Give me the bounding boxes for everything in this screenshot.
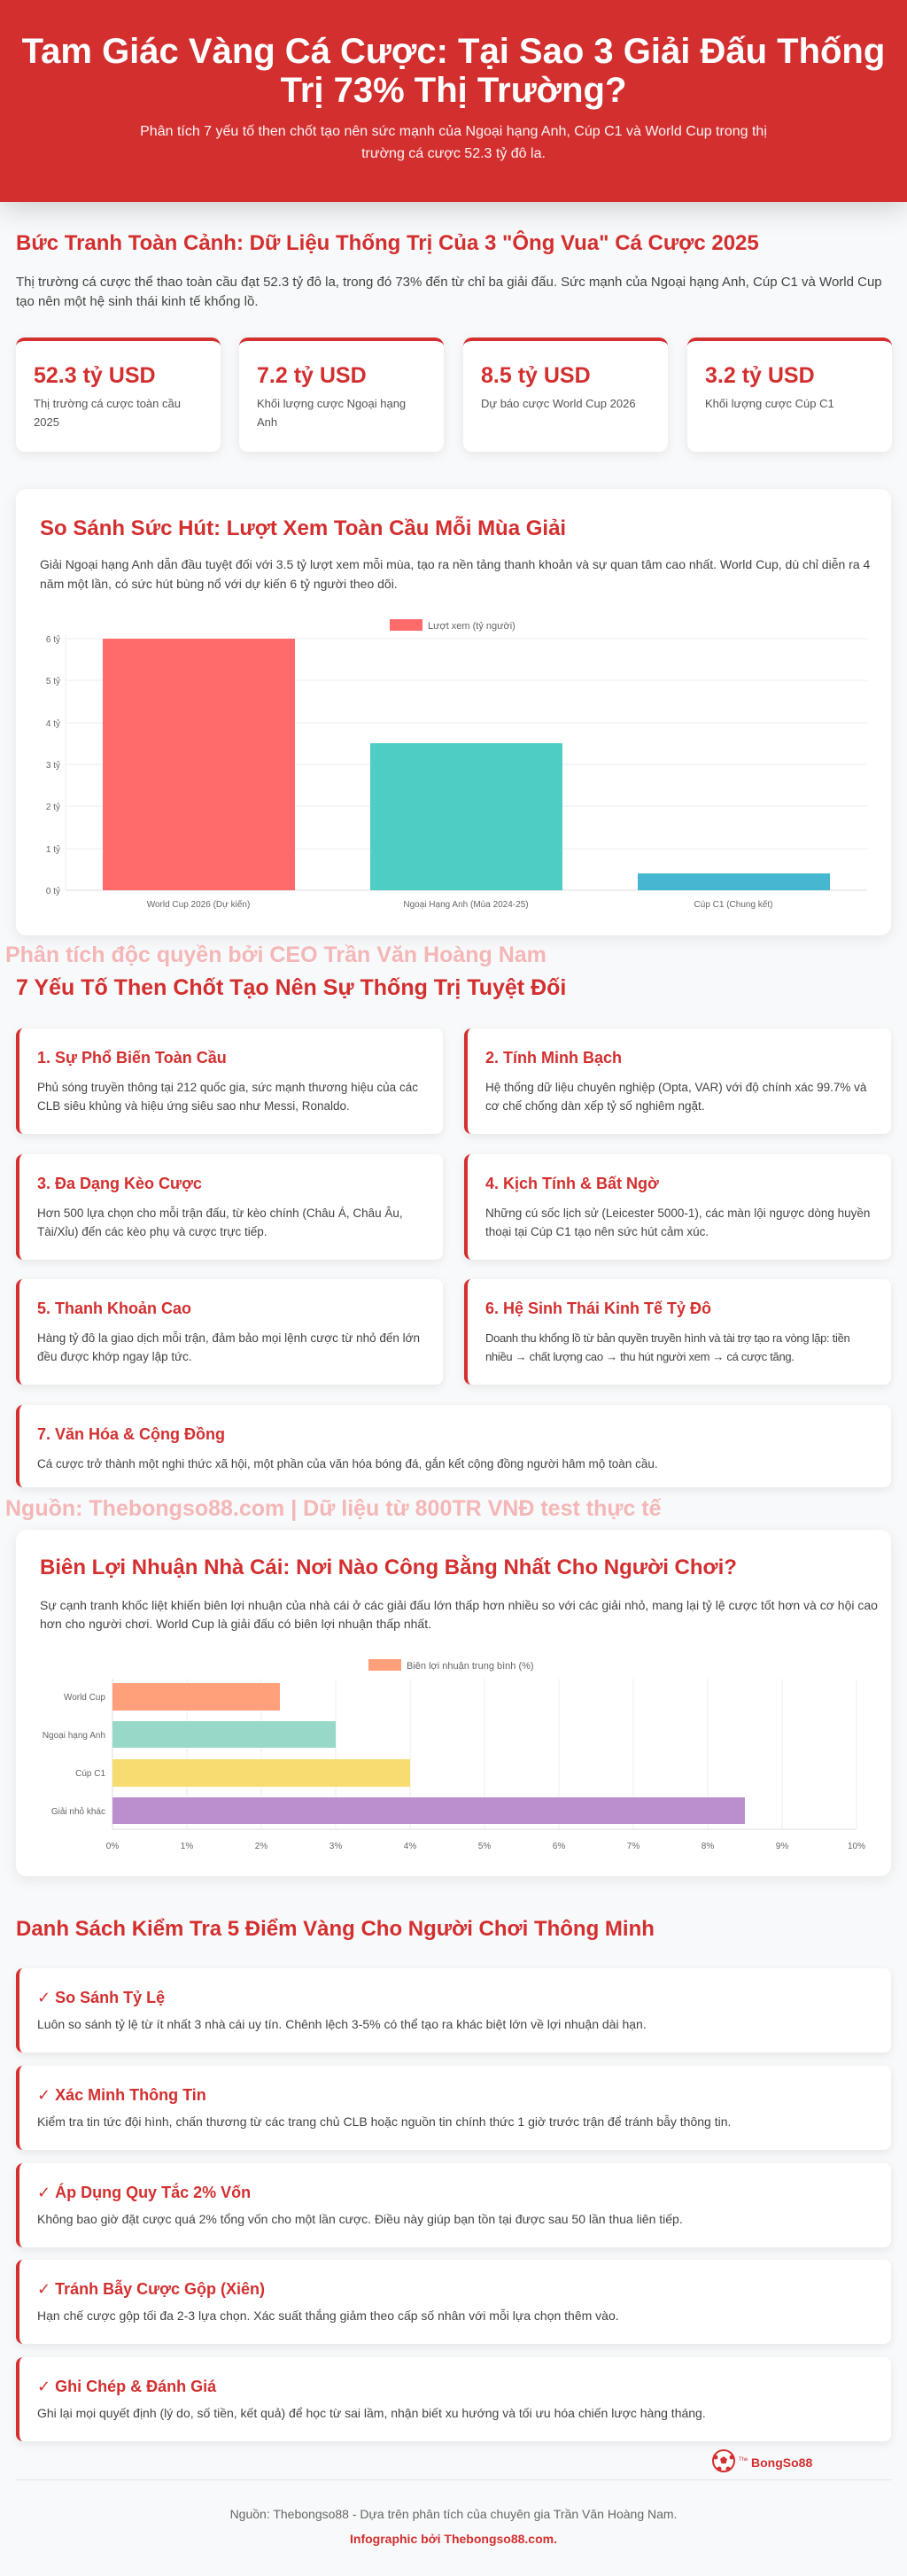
horizontal bar chart: margins: 2% bbox=[255, 1842, 267, 1851]
bar chart: viewership: 3 tỷ bbox=[46, 760, 60, 771]
stat card 2: Khối lượng cược Ngoại hạng Anh bbox=[257, 397, 406, 429]
bars bbox=[112, 1683, 745, 1824]
checklist item 5 bbox=[16, 2357, 891, 2441]
bar chart: viewership: 4 tỷ bbox=[46, 718, 60, 729]
watermark 1: Phân tích độc quyền bởi CEO Trần Văn Hoàng Nam bbox=[5, 943, 547, 967]
logo: BongSo88: BongSo88 bbox=[751, 2456, 812, 2470]
checklist item 2 bbox=[16, 2066, 891, 2150]
horizontal bar chart: margins: 4% bbox=[404, 1842, 416, 1851]
checklist item 4 bbox=[16, 2260, 891, 2344]
checklist item 1 bbox=[16, 1968, 891, 2052]
factor card 1: Phủ sóng truyền thông tại 212 quốc gia, sức mạnh thương hiệu của các CLB siêu khủng và hiệu ứng siêu sao như Messi, Ronaldo. bbox=[37, 1081, 418, 1113]
checklist item 3: ✓ Áp Dụng Quy Tắc 2% Vốn bbox=[37, 2184, 251, 2201]
factor card 3 bbox=[16, 1154, 443, 1260]
horizontal bar chart: margins: Giải nhỏ khác bbox=[51, 1806, 105, 1817]
legend bbox=[390, 619, 516, 632]
stat card 1: 52.3 tỷ USD bbox=[34, 363, 156, 388]
factor card 4: Những cú sốc lịch sử (Leicester 5000-1), các màn lội ngược dòng huyền thoại tại Cúp C1 tạo nên sức hút cảm xúc. bbox=[485, 1207, 870, 1238]
legend: Biên lợi nhuận trung bình (%) bbox=[407, 1661, 534, 1672]
horizontal bar chart: margins: 8% bbox=[702, 1842, 714, 1851]
factor card 6 bbox=[464, 1279, 891, 1385]
bar chart: viewership: Ngoại Hạng Anh (Mùa 2024-25) bbox=[403, 900, 529, 910]
stat card 3: 8.5 tỷ USD bbox=[481, 363, 591, 388]
legend bbox=[368, 1659, 534, 1672]
factor card 4: 4. Kịch Tính & Bất Ngờ bbox=[485, 1175, 659, 1192]
checklist item 4: Hạn chế cược gộp tối đa 2-3 lựa chọn. Xác suất thắng giảm theo cấp số nhân với mỗi lựa chọn thêm vào. bbox=[37, 2308, 619, 2323]
bar chart: viewership: 1 tỷ bbox=[46, 844, 60, 855]
checklist item 2: ✓ Xác Minh Thông Tin bbox=[37, 2086, 206, 2104]
stat card 2: 7.2 tỷ USD bbox=[257, 363, 367, 388]
logo: BongSo88 bbox=[712, 2449, 812, 2472]
footer: Infographic bởi Thebongso88.com. bbox=[350, 2532, 557, 2546]
checklist item 4: ✓ Tránh Bẫy Cược Gộp (Xiên) bbox=[37, 2280, 265, 2298]
factor card 6: Doanh thu khổng lồ từ bản quyền truyền hình và tài trợ tạo ra vòng lặp: tiền nhiều → chất lượng cao → thu hút người xem → cá cược tăng. bbox=[485, 1331, 849, 1363]
checklist item 2: Kiểm tra tin tức đội hình, chấn thương từ các trang chủ CLB hoặc nguồn tin chính thức 1 giờ trước trận để tránh bẫy thông tin. bbox=[37, 2114, 731, 2129]
legend: Lượt xem (tỷ người) bbox=[428, 621, 516, 632]
factor card 5: 5. Thanh Khoản Cao bbox=[37, 1300, 191, 1317]
section heading: overview: Bức Tranh Toàn Cảnh: Dữ Liệu Thống Trị Của 3 "Ông Vua" Cá Cược 2025 bbox=[16, 231, 759, 255]
title: Tam Giác Vàng Cá Cược: Tại Sao 3 Giải Đấu Thống Trị 73% Thị Trường? bbox=[22, 32, 885, 110]
checklist item 5: ✓ Ghi Chép & Đánh Giá bbox=[37, 2378, 216, 2395]
bar chart: viewership: 2 tỷ bbox=[46, 802, 60, 812]
panel paragraph: Sự cạnh tranh khốc liệt khiến biên lợi nhuận của nhà cái ở các giải đấu lớn thấp hơn nhiều so với các giải nhỏ, mang lại tỷ lệ cược tốt hơn và cơ hội cao hơn cho người chơi. World Cup là giải đấu có biên lợi nhuận thấp nhất. bbox=[40, 1598, 878, 1631]
factor card 7 bbox=[16, 1405, 891, 1487]
stat card 3: Dự báo cược World Cup 2026 bbox=[481, 397, 636, 410]
footer bbox=[230, 2507, 677, 2546]
horizontal bar chart: margins: 10% bbox=[848, 1842, 865, 1851]
footer: Nguồn: Thebongso88 - Dựa trên phân tích của chuyên gia Trần Văn Hoàng Nam. bbox=[230, 2507, 677, 2521]
factor card 4 bbox=[464, 1154, 891, 1260]
factor card 3: Hơn 500 lựa chọn cho mỗi trận đấu, từ kèo chính (Châu Á, Châu Âu, Tài/Xỉu) đến các kèo phụ và cược trực tiếp. bbox=[37, 1207, 403, 1238]
checklist item 1: Luôn so sánh tỷ lệ từ ít nhất 3 nhà cái uy tín. Chênh lệch 3-5% có thể tạo ra khác biệt lớn về lợi nhuận dài hạn. bbox=[37, 2017, 647, 2031]
checklist item 1: ✓ So Sánh Tỷ Lệ bbox=[37, 1989, 165, 2006]
factor card 5: Hàng tỷ đô la giao dịch mỗi trận, đảm bảo mọi lệnh cược từ nhỏ đến lớn đều được khớp ngay lập tức. bbox=[37, 1331, 420, 1363]
stat card 3 bbox=[463, 338, 668, 452]
panel paragraph: Giải Ngoại hạng Anh dẫn đầu tuyệt đối với 3.5 tỷ lượt xem mỗi mùa, tạo ra nền tảng thanh khoản và sự quan tâm cao nhất. World Cup, dù chỉ diễn ra 4 năm một lần, có sức hút bùng nổ với dự kiến 6 tỷ người theo dõi. bbox=[40, 557, 870, 591]
factor card 2: 2. Tính Minh Bạch bbox=[485, 1049, 622, 1067]
horizontal bar chart: margins: 9% bbox=[776, 1842, 788, 1851]
horizontal bar chart: margins: 0% bbox=[106, 1842, 119, 1851]
factor card 2: Hệ thống dữ liệu chuyên nghiệp (Opta, VAR) với độ chính xác 99.7% và cơ chế chống dàn xếp tỷ số nghiêm ngặt. bbox=[485, 1081, 866, 1113]
horizontal bar chart: margins: Ngoại hạng Anh bbox=[43, 1731, 105, 1741]
stat card 1 bbox=[16, 338, 221, 452]
horizontal bar chart: margins: 7% bbox=[627, 1842, 640, 1851]
bars bbox=[103, 639, 830, 890]
section heading: 7 factors: 7 Yếu Tố Then Chốt Tạo Nên Sự Thống Trị Tuyệt Đối bbox=[16, 975, 566, 1000]
factor card 1: 1. Sự Phổ Biến Toàn Cầu bbox=[37, 1049, 227, 1067]
bar chart: viewership bbox=[46, 619, 867, 910]
bar chart: viewership: 6 tỷ bbox=[46, 634, 60, 645]
logo: BongSo88: The bbox=[739, 2457, 748, 2463]
factor card 7: Cá cược trở thành một nghi thức xã hội, một phần của văn hóa bóng đá, gắn kết cộng đồng người hâm mộ toàn cầu. bbox=[37, 1457, 658, 1470]
section heading: checklist: Danh Sách Kiểm Tra 5 Điểm Vàng Cho Người Chơi Thông Minh bbox=[16, 1917, 655, 1941]
panel: viewership chart bbox=[16, 489, 891, 935]
horizontal bar chart: margins: 5% bbox=[478, 1842, 491, 1851]
factor card 3: 3. Đa Dạng Kèo Cược bbox=[37, 1175, 202, 1192]
horizontal bar chart: margins: 1% bbox=[181, 1842, 193, 1851]
factor card 5 bbox=[16, 1279, 443, 1385]
factor card 2 bbox=[464, 1028, 891, 1134]
panel heading: Biên Lợi Nhuận Nhà Cái: Nơi Nào Công Bằng Nhất Cho Người Chơi? bbox=[40, 1556, 737, 1579]
bar chart: viewership: 5 tỷ bbox=[46, 676, 60, 687]
factor card 1 bbox=[16, 1028, 443, 1134]
bar chart: viewership: Cúp C1 (Chung kết) bbox=[694, 899, 772, 910]
stat card 2 bbox=[239, 338, 444, 452]
horizontal bar chart: margins: World Cup bbox=[64, 1693, 105, 1703]
stat card 4 bbox=[687, 338, 892, 452]
checklist item 3 bbox=[16, 2163, 891, 2247]
panel heading: So Sánh Sức Hút: Lượt Xem Toàn Cầu Mỗi Mùa Giải bbox=[40, 516, 566, 540]
horizontal bar chart: margins: 3% bbox=[329, 1842, 342, 1851]
checklist item 5: Ghi lại mọi quyết định (lý do, số tiền, kết quả) để học từ sai lầm, nhận biết xu hướng và tối ưu hóa chiến lược hàng tháng. bbox=[37, 2406, 706, 2420]
overview paragraph: Thị trường cá cược thể thao toàn cầu đạt 52.3 tỷ đô la, trong đó 73% đến từ chỉ ba giải đấu. Sức mạnh của Ngoại hạng Anh, Cúp C1 và World Cup tạo nên một hệ sinh thái kinh tế khổng lồ. bbox=[16, 275, 882, 309]
checklist item 3: Không bao giờ đặt cược quá 2% tổng vốn cho một lần cược. Điều này giúp bạn tồn tại được sau 50 lần thua liên tiếp. bbox=[37, 2212, 683, 2226]
watermark 2: Nguồn: Thebongso88.com | Dữ liệu từ 800TR VNĐ test thực tế bbox=[5, 1496, 662, 1521]
horizontal bar chart: margins: 6% bbox=[553, 1842, 565, 1851]
stat card 4: 3.2 tỷ USD bbox=[705, 363, 815, 388]
horizontal bar chart: margins bbox=[43, 1659, 865, 1851]
bar chart: viewership: World Cup 2026 (Dự kiến) bbox=[147, 899, 250, 910]
horizontal bar chart: margins: Cúp C1 bbox=[75, 1769, 105, 1779]
stat card 1: Thị trường cá cược toàn cầu 2025 bbox=[34, 397, 181, 429]
stat card 4: Khối lượng cược Cúp C1 bbox=[705, 397, 834, 410]
factor card 7: 7. Văn Hóa & Cộng Đồng bbox=[37, 1425, 225, 1443]
panel: bookmaker margin chart bbox=[16, 1530, 891, 1876]
header bbox=[0, 0, 907, 202]
subtitle: Phân tích 7 yếu tố then chốt tạo nên sức mạnh của Ngoại hạng Anh, Cúp C1 và World Cup trong thị trường cá cược 52.3 tỷ đô la. bbox=[140, 124, 767, 161]
factor card 6: 6. Hệ Sinh Thái Kinh Tế Tỷ Đô bbox=[485, 1300, 711, 1317]
bar chart: viewership: 0 tỷ bbox=[46, 886, 60, 896]
